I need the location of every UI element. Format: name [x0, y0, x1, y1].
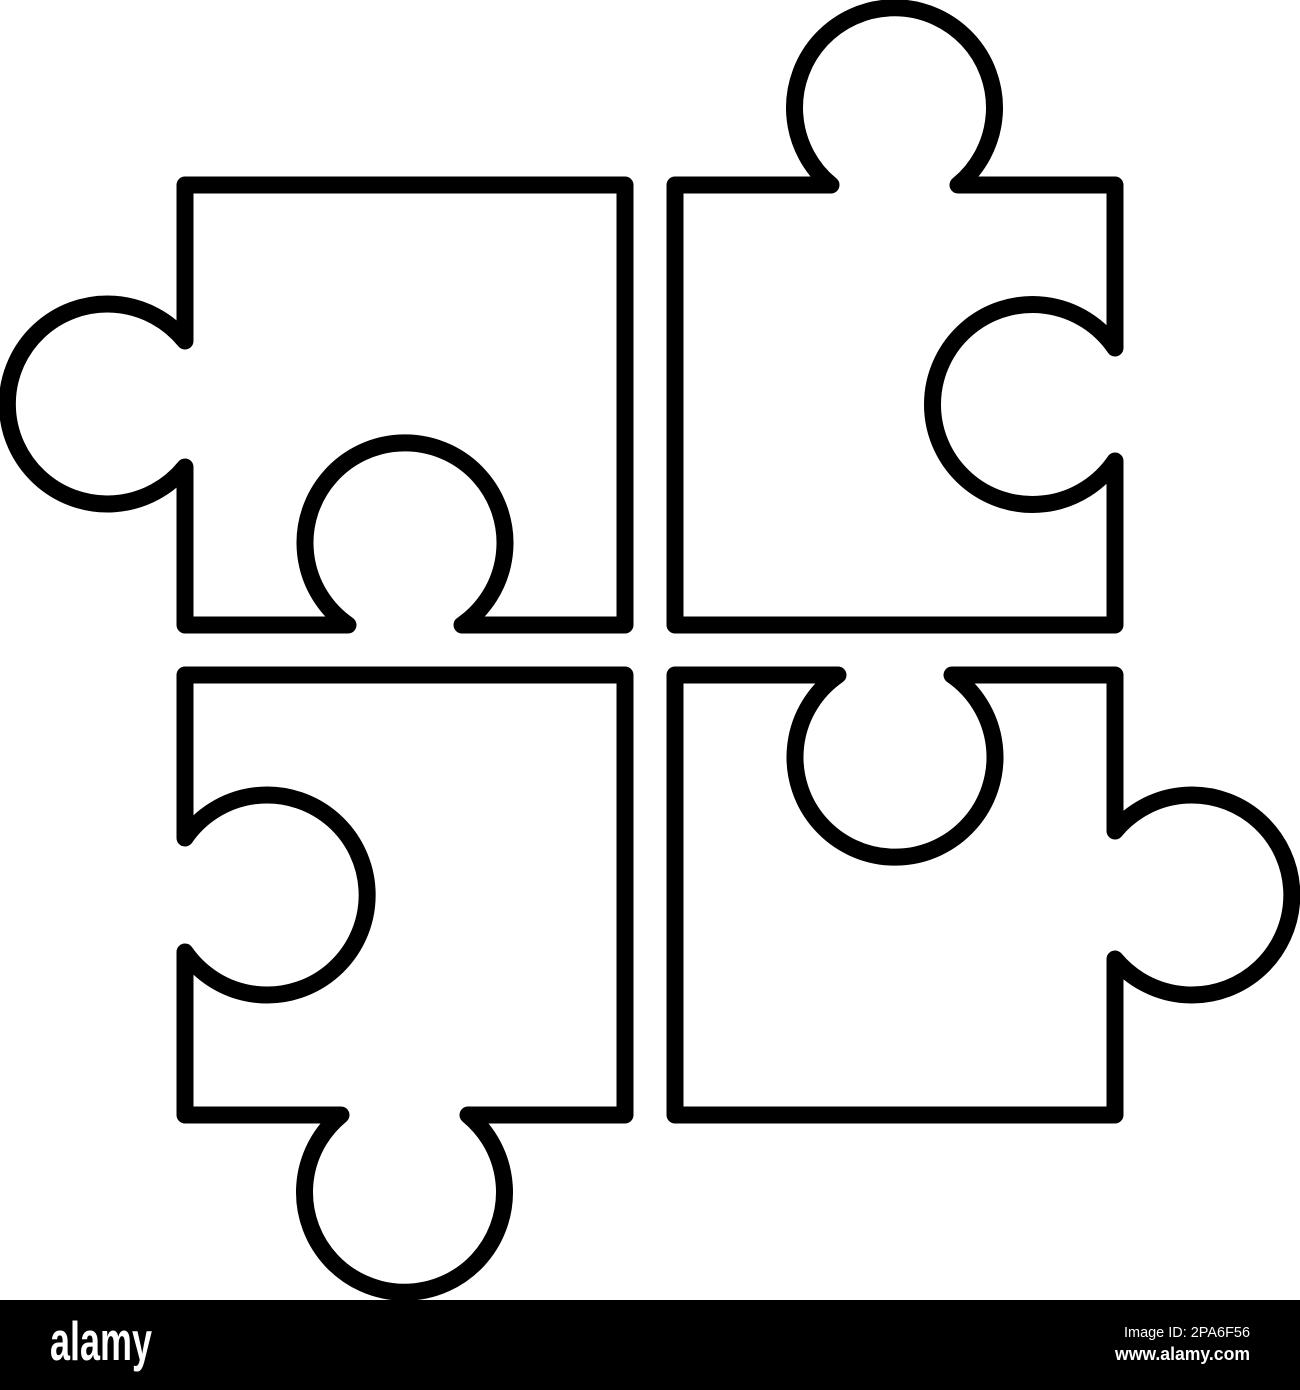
footer bar [0, 1300, 1300, 1390]
image id: Image ID: 2PA6F56 [1124, 1324, 1250, 1341]
puzzle piece: bottom left [185, 675, 625, 1292]
website: www.alamy.com [1114, 1344, 1250, 1364]
puzzle piece: top left [7, 185, 625, 625]
puzzle piece: bottom right [675, 675, 1292, 1115]
logo text: alamy [50, 1310, 152, 1372]
puzzle piece: top right [675, 8, 1115, 625]
